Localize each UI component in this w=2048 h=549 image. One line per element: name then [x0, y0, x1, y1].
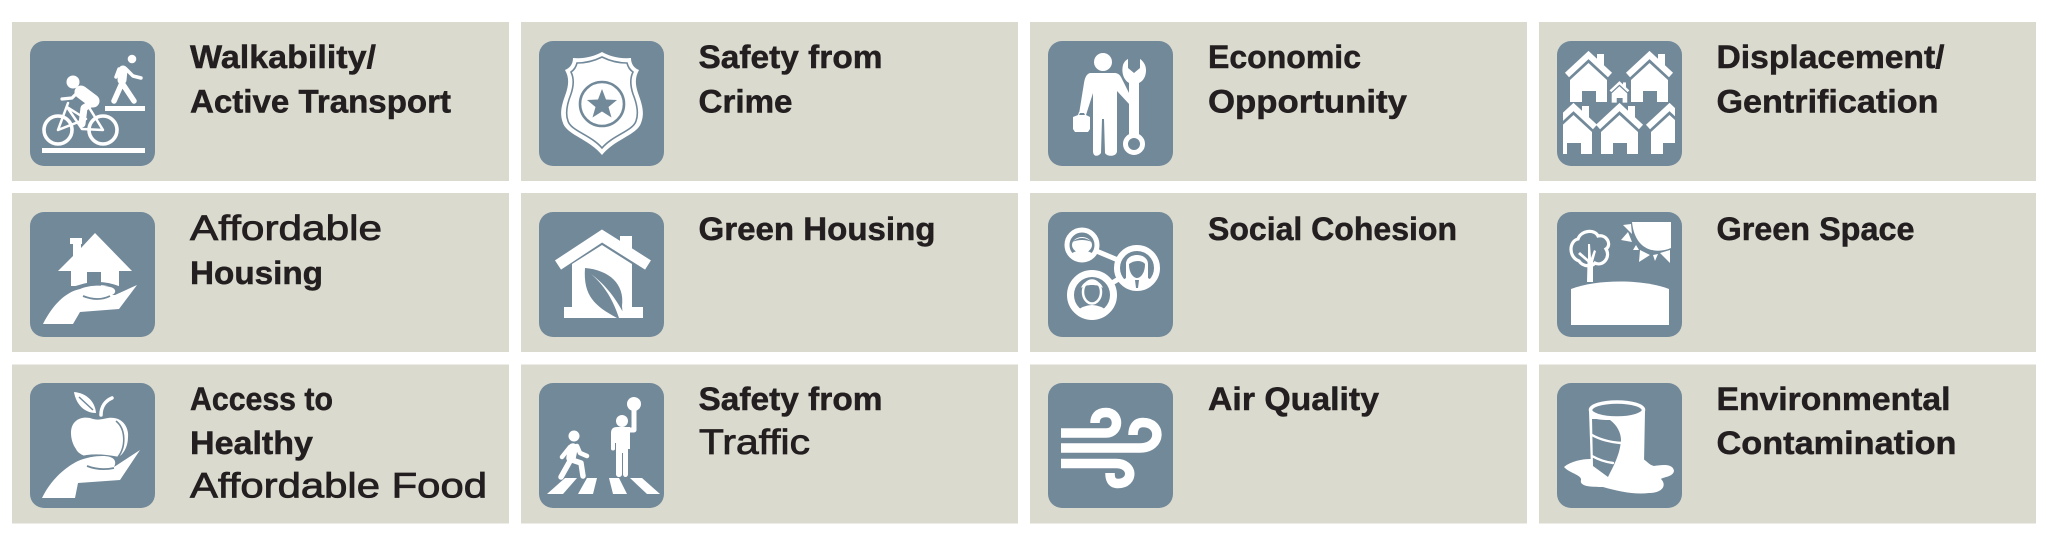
heading: Safety from Traffic: Safety from [698, 381, 882, 417]
heading: Environmental Contamination: Contamination [1716, 425, 1956, 461]
heading: Affordable Housing: Affordable [190, 209, 382, 248]
panel: displacement / gentrification [1539, 22, 2036, 181]
panel: environmental contamination [1539, 364, 2036, 524]
panel: air quality [1030, 364, 1527, 524]
icon: police badge [539, 41, 664, 166]
icon: connected people [1048, 212, 1173, 337]
panel: access to healthy affordable food [12, 364, 509, 524]
heading: Green Space: Green Space [1716, 211, 1914, 247]
panel: green space [1539, 193, 2036, 352]
heading: Walkability/ Active Transport: Walkability/ [190, 39, 376, 75]
icon: wind [1048, 383, 1173, 508]
heading: Access to Healthy Affordable Food: Affordable Food [190, 467, 487, 506]
heading: Affordable Housing: Housing [190, 255, 323, 291]
icon: house on hand [30, 212, 155, 337]
heading: Economic Opportunity: Opportunity [1208, 84, 1407, 120]
heading: Environmental Contamination: Environmental [1716, 381, 1950, 417]
heading: Access to Healthy Affordable Food: Access to [190, 381, 333, 417]
heading: Green Housing: Green Housing [698, 211, 936, 247]
heading: Safety from Crime: Safety from [698, 39, 882, 75]
panel: social cohesion [1030, 193, 1527, 352]
icon: houses [1557, 41, 1682, 166]
heading: Walkability/ Active Transport: Active Transport [190, 84, 451, 120]
icon: crossing guard and pedestrian [539, 383, 664, 508]
heading: Air Quality: Air Quality [1208, 381, 1379, 417]
heading: Economic Opportunity: Economic [1208, 39, 1361, 75]
panel: green housing [521, 193, 1018, 352]
panel: economic opportunity [1030, 22, 1527, 181]
icon: leaking barrel [1557, 383, 1682, 508]
panel: safety from crime [521, 22, 1018, 181]
icon: house with leaf [539, 212, 664, 337]
icon: worker with wrench and briefcase [1048, 41, 1173, 166]
icon: cyclist and pedestrian [30, 41, 155, 166]
heading: Social Cohesion: Social Cohesion [1208, 211, 1457, 247]
icon: tree, sun and hill [1557, 212, 1682, 337]
heading: Safety from Traffic: Traffic [699, 423, 810, 462]
panel: affordable housing [12, 193, 509, 352]
heading: Displacement/ Gentrification: Displacement/ [1716, 39, 1944, 75]
heading: Displacement/ Gentrification: Gentrification [1716, 84, 1938, 120]
panel: walkability / active transport [12, 22, 509, 181]
icon: apple on hand [30, 383, 155, 508]
panel: safety from traffic [521, 364, 1018, 524]
heading: Access to Healthy Affordable Food: Healthy [190, 425, 313, 461]
heading: Safety from Crime: Crime [698, 84, 792, 120]
